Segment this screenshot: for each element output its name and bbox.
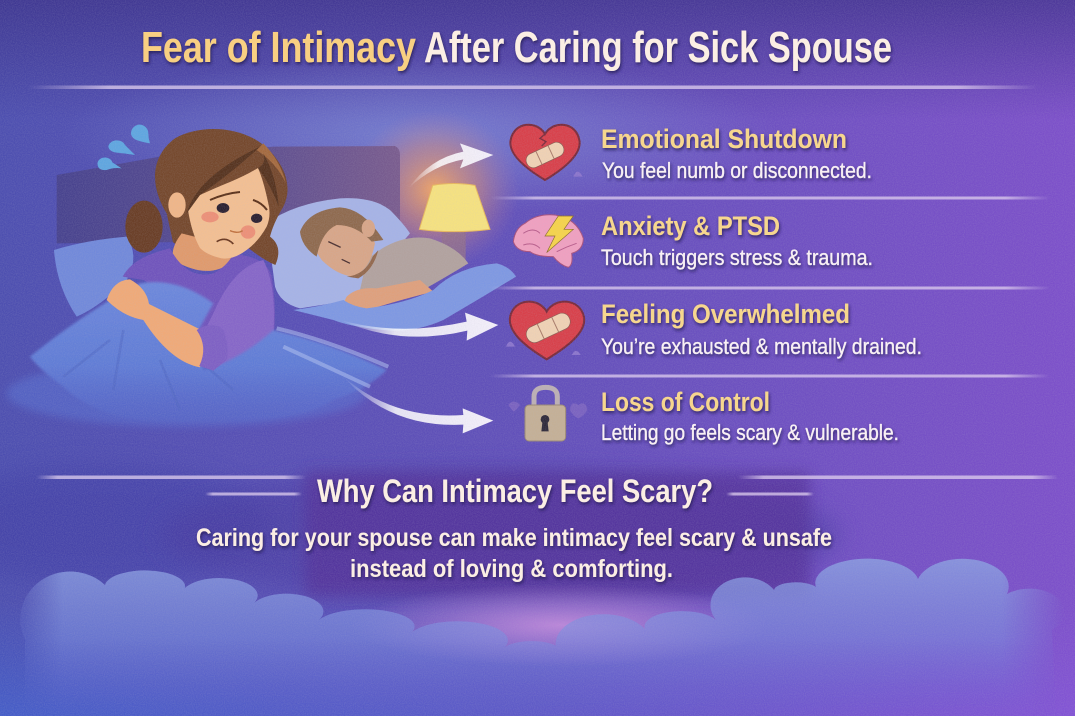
face: [188, 168, 270, 259]
list: emotional shutdown: Emotional Shutdown: [601, 124, 847, 154]
list: feeling overwhelmed: Feeling Overwhelmed: [601, 299, 850, 329]
pillow: woman: [54, 237, 133, 317]
divider lines: [28, 86, 1058, 496]
bottom clouds: [20, 558, 1054, 688]
icon: bandaged heart: [506, 302, 584, 359]
blanket folds: [63, 330, 233, 410]
blanket over man: [293, 263, 516, 331]
dark caption band: [160, 470, 840, 600]
lamp: [419, 183, 490, 261]
arrow to loss of control: [343, 377, 493, 433]
icons: [506, 125, 587, 441]
list: loss of control: Loss of Control: [601, 387, 770, 417]
lamp glow: [350, 110, 520, 270]
list: emotional shutdown: You feel numb or disconnected.: [602, 158, 872, 183]
list: anxiety and PTSD: [601, 211, 873, 270]
closing text: [196, 524, 832, 583]
title: After Caring for Sick Spouse: [424, 23, 892, 72]
sleeve cuff: [197, 325, 228, 371]
list: feeling overwhelmed: [601, 299, 922, 359]
list: loss of control: [601, 387, 899, 445]
icon: padlock: [508, 387, 587, 441]
icon: broken bandaged heart: [510, 125, 583, 180]
arrow to emotional shutdown: [408, 143, 493, 188]
closing text: instead of loving & comforting.: [350, 555, 673, 583]
sweat drops: [97, 125, 150, 170]
pillow: man: [267, 198, 410, 308]
headboard: [57, 146, 400, 243]
soft bed shadow under woman: [7, 360, 367, 427]
title: Fear of Intimacy: [141, 23, 416, 72]
closing text: Caring for your spouse can make intimacy feel scary & unsafe: [196, 524, 832, 552]
man sleeping: [300, 207, 468, 309]
illustration: couple in bed: [7, 125, 516, 433]
list: loss of control: Letting go feels scary & vulnerable.: [601, 420, 899, 445]
blanket clutched: [30, 282, 387, 422]
arm and hand: [107, 279, 204, 367]
list: feeling overwhelmed: You’re exhausted & mentally drained.: [601, 334, 922, 359]
list: anxiety and PTSD: Anxiety & PTSD: [601, 211, 780, 241]
arrow to feeling overwhelmed: [340, 313, 498, 341]
heading: why can intimacy feel scary: Why Can Intimacy Feel Scary?: [317, 473, 713, 509]
list: emotional shutdown: [601, 124, 872, 183]
blanket streaks: [277, 328, 388, 387]
title: [141, 23, 892, 72]
icon: brain with lightning: [513, 215, 583, 267]
list: anxiety and PTSD: Touch triggers stress & trauma.: [601, 245, 873, 270]
woman: [123, 129, 288, 371]
